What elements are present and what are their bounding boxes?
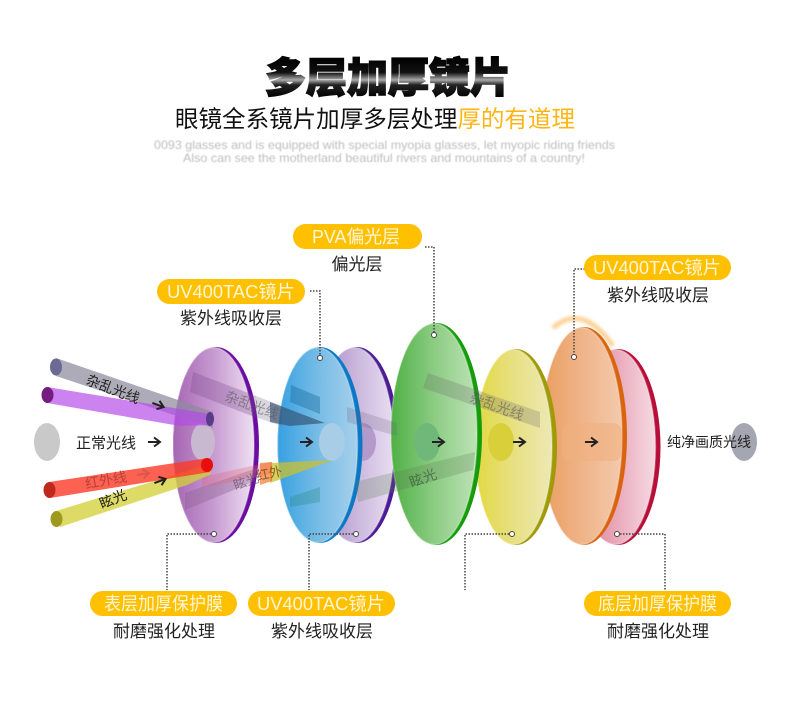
callout: UV400TAC bottom: 紫外线吸收层 — [271, 622, 373, 641]
callout: PVA polarizing layer: 偏光层 — [332, 255, 382, 274]
English description — [154, 138, 615, 165]
callout: surface protective film: 耐磨强化处理 — [113, 622, 215, 641]
beam labels: 红外 — [255, 463, 283, 484]
beam labels: 眩光 — [97, 486, 129, 512]
beam labels: 红外线 — [84, 468, 128, 492]
callout: UV400TAC bottom: UV400TAC镜片 — [257, 594, 385, 614]
callout: UV400TAC left top: UV400TAC镜片 — [167, 282, 295, 302]
dotted leader lines with lens holes — [167, 247, 665, 590]
callout: UV400TAC right top: 紫外线吸收层 — [607, 286, 709, 305]
beam labels: 杂乱光线 — [84, 371, 142, 407]
callout: UV400TAC right top: UV400TAC镜片 — [593, 258, 721, 278]
callout: surface protective film: 表层加厚保护膜 — [104, 594, 223, 614]
lens 4: green PVA polarizing lens — [391, 323, 482, 545]
English description: 0093 glasses and is equipped with special myopia glasses, let myopic riding friends — [154, 138, 615, 152]
lens 2: blue UV absorbing lens — [278, 347, 362, 543]
beam labels — [76, 371, 526, 512]
lens 7: red bottom protective film — [576, 349, 660, 545]
lens 1: purple surface protective film — [173, 347, 259, 543]
exit light spot — [731, 423, 757, 461]
subtitle: 眼镜全系镜片加厚多层处理厚的有道理 — [175, 106, 575, 132]
beam labels: 杂乱光线 — [223, 388, 281, 422]
exit light label: 纯净画质光线 — [667, 434, 751, 450]
ghost light bands passing through lenses — [185, 372, 540, 510]
direction arrows — [136, 399, 597, 487]
callout: bottom protective film — [584, 591, 731, 641]
beam labels: 眩光 — [407, 466, 439, 490]
beam labels: 眩光 — [231, 470, 261, 493]
callout: UV400TAC left top — [157, 279, 305, 328]
title: 多层加厚镜片 — [265, 55, 511, 101]
halo above orange lens — [553, 318, 613, 346]
callout: UV400TAC left top: 紫外线吸收层 — [180, 309, 282, 328]
beam labels: 正常光线 — [76, 435, 136, 452]
lens 5: yellow lens — [475, 349, 557, 545]
callout: UV400TAC bottom — [248, 591, 395, 641]
beam labels: 杂乱光线 — [468, 389, 526, 423]
beams inside blue lens — [260, 402, 333, 485]
English description: Also can see the motherland beautiful rivers and mountains of a country! — [183, 151, 585, 165]
callout: PVA polarizing layer: PVA偏光层 — [312, 227, 400, 247]
lens 3: violet UV absorbing lens — [315, 347, 399, 543]
lens 6: orange UV absorbing lens — [541, 327, 627, 545]
callout: UV400TAC right top — [584, 255, 731, 305]
callout: surface protective film — [90, 591, 237, 641]
callout: bottom protective film: 耐磨强化处理 — [607, 622, 709, 641]
incoming light source: normal light — [34, 423, 60, 461]
callout: PVA polarizing layer — [293, 224, 422, 274]
callout: bottom protective film: 底层加厚保护膜 — [598, 594, 717, 614]
incoming light beams — [42, 358, 214, 527]
